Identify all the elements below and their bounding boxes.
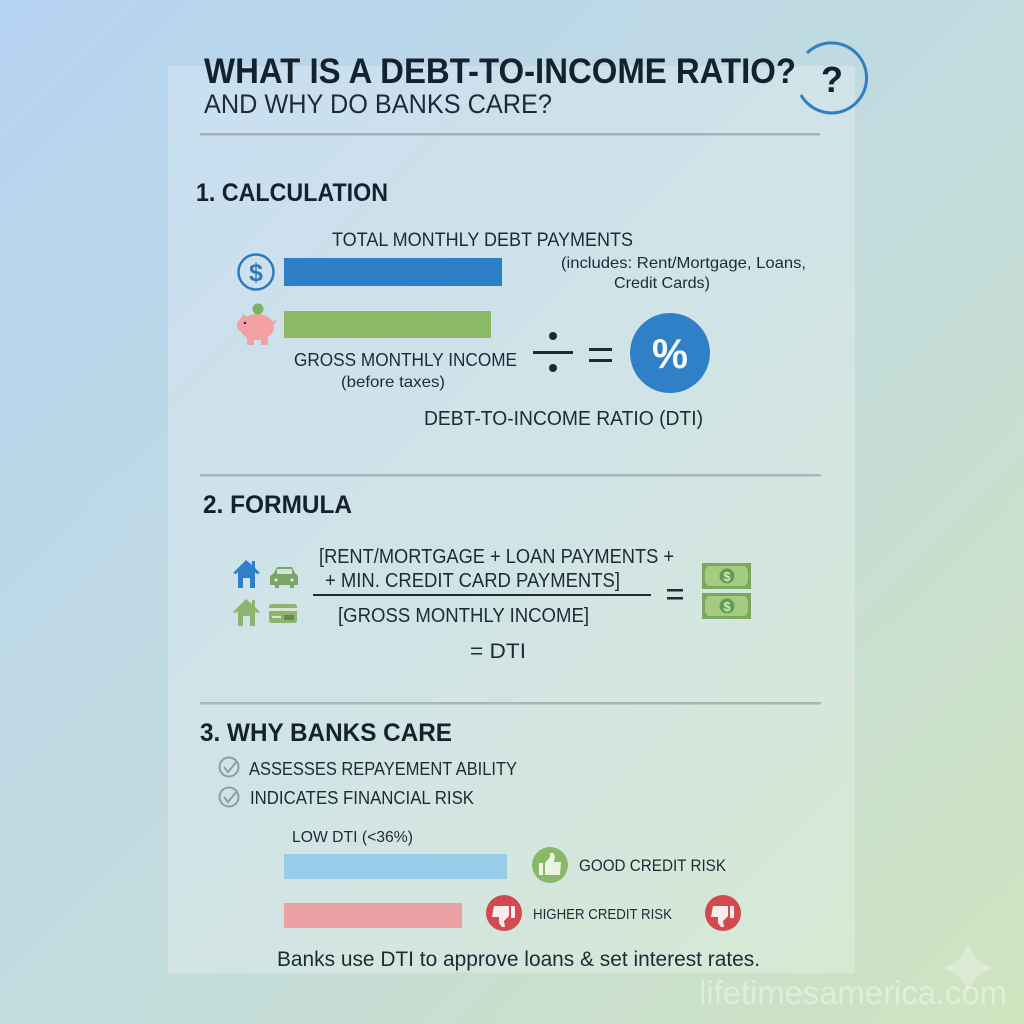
icon: check 1 — [220, 758, 238, 776]
title: WHAT IS A DEBT-TO-INCOME RATIO? — [204, 52, 796, 91]
icon: banknote bottom: $ — [723, 599, 731, 614]
formula denominator: [GROSS MONTHLY INCOME] — [338, 605, 589, 627]
section 2: formula — [203, 491, 751, 663]
icon: blue house — [233, 560, 260, 588]
icon: banknote bottom — [702, 593, 751, 619]
section 3: why banks care — [200, 719, 741, 931]
icon: question mark — [801, 43, 867, 113]
label: good credit risk: GOOD CREDIT RISK — [579, 856, 727, 875]
equals — [667, 589, 683, 600]
icon: green house — [233, 599, 260, 626]
watermark — [699, 944, 1007, 1011]
text: risk: INDICATES FINANCIAL RISK — [250, 788, 474, 808]
note: includes — [561, 255, 806, 292]
note: before taxes: (before taxes) — [341, 374, 445, 391]
icon: thumbs up — [532, 847, 568, 883]
label: low DTI: LOW DTI (<36%) — [292, 829, 413, 846]
icon: divide — [533, 332, 573, 372]
icon: percent: % — [652, 330, 688, 377]
icon: percent — [630, 313, 710, 393]
bar: debt — [284, 258, 502, 286]
heading: why banks care: 3. WHY BANKS CARE — [200, 719, 452, 747]
label: total monthly debt payments: TOTAL MONTHLY DEBT PAYMENTS — [332, 230, 633, 251]
icon: dollar: $ — [249, 259, 263, 287]
formula numerator: [RENT/MORTGAGE + LOAN PAYMENTS + — [319, 546, 674, 568]
header — [204, 43, 867, 119]
bar: income — [284, 311, 491, 338]
section 1: calculation — [196, 179, 806, 430]
label: gross monthly income: GROSS MONTHLY INCOME — [294, 350, 517, 370]
fraction bar — [313, 594, 651, 596]
note: includes: (includes: Rent/Mortgage, Loans, — [561, 255, 806, 272]
formula numerator — [319, 546, 674, 592]
formula numerator: + MIN. CREDIT CARD PAYMENTS] — [325, 570, 620, 592]
icon: sparkle — [943, 944, 993, 992]
icon: banknote top — [702, 563, 751, 589]
label: higher credit risk: HIGHER CREDIT RISK — [533, 906, 672, 923]
bar: high DTI — [284, 903, 462, 928]
heading: calculation: 1. CALCULATION — [196, 179, 388, 207]
label: debt-to-income ratio: DEBT-TO-INCOME RATIO (DTI) — [424, 408, 703, 430]
icon: check 2 — [220, 788, 238, 806]
result: equals DTI: = DTI — [470, 640, 526, 663]
note: includes: Credit Cards) — [614, 275, 710, 292]
icon: question mark: ? — [821, 59, 843, 100]
panel: main card — [168, 66, 855, 973]
icon: piggy bank — [237, 304, 276, 345]
icon: thumbs down 1 — [486, 895, 522, 931]
icon: thumbs down 2 — [705, 895, 741, 931]
watermark text: lifetimesamerica.com — [699, 974, 1007, 1011]
heading: formula: 2. FORMULA — [203, 491, 352, 519]
text: repayment: ASSESSES REPAYEMENT ABILITY — [249, 759, 517, 779]
icon: credit card — [269, 604, 297, 623]
icon: equals — [589, 348, 612, 362]
icon: dollar — [238, 254, 274, 290]
subtitle: AND WHY DO BANKS CARE? — [204, 89, 552, 119]
bar: low DTI — [284, 854, 507, 879]
footer note: Banks use DTI to approve loans & set interest rates. — [277, 948, 760, 971]
icon: banknote top: $ — [723, 569, 731, 584]
icon: car — [270, 567, 298, 588]
